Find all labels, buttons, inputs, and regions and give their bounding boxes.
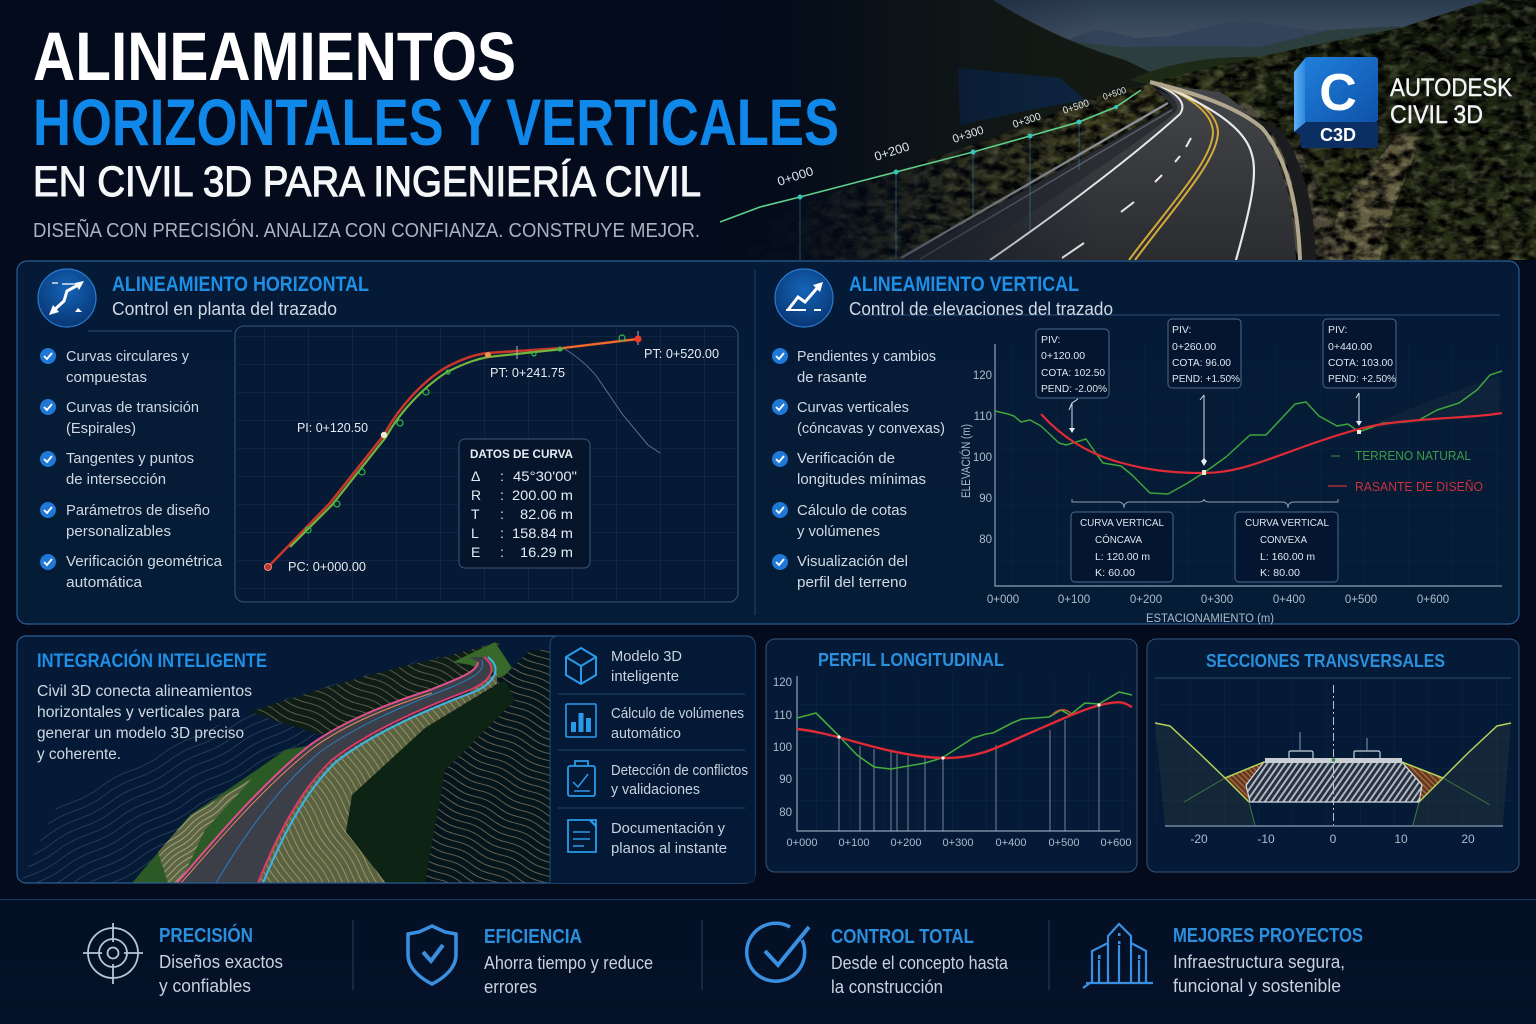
chart: perfil longitudinal: 110 bbox=[774, 710, 792, 722]
checklist: vertical: Visualización del bbox=[797, 553, 908, 570]
checklist: vertical: Curvas verticales bbox=[797, 399, 909, 416]
callout: PIV 0+440: 0+440.00 bbox=[1328, 341, 1372, 353]
chart: perfil vertical: 0+200 bbox=[1130, 594, 1162, 606]
callout: curva convexa: CURVA VERTICAL bbox=[1245, 517, 1329, 529]
chart: perfil vertical: 0+600 bbox=[1417, 594, 1449, 606]
chart: perfil vertical: 0+500 bbox=[1345, 594, 1377, 606]
checklist: horizontal: de intersección bbox=[66, 471, 166, 488]
checklist: horizontal: Parámetros de diseño bbox=[66, 502, 210, 519]
table: datos de curva: 16.29 m bbox=[520, 544, 573, 560]
title block: DISEÑA CON PRECISIÓN. ANALIZA CON CONFIANZA. CONSTRUYE MEJOR. bbox=[33, 218, 700, 242]
checklist: vertical: (cóncavas y convexas) bbox=[797, 420, 945, 437]
chart: perfil vertical: ESTACIONAMIENTO (m) bbox=[1146, 613, 1274, 625]
heading and description: horizontales y verticales para bbox=[37, 704, 240, 721]
benefits strip bbox=[0, 899, 1536, 1024]
table: datos de curva: 82.06 m bbox=[520, 506, 573, 522]
callout: PIV 0+260: PIV: bbox=[1172, 324, 1191, 336]
3D corridor model bbox=[20, 640, 552, 883]
checklist: vertical: Verificación de bbox=[797, 450, 895, 467]
panel: secciones transversales bbox=[1147, 639, 1519, 872]
chart: perfil longitudinal bbox=[773, 676, 1132, 849]
logo: Autodesk Civil 3D: C3D bbox=[1320, 125, 1356, 145]
heading: alineamiento vertical: ALINEAMIENTO VERTICAL bbox=[849, 273, 1079, 296]
feature list: Modelo 3D bbox=[611, 649, 682, 665]
benefit: eficiencia: Ahorra tiempo y reduce bbox=[484, 953, 653, 973]
checklist: horizontal: Tangentes y puntos bbox=[66, 450, 194, 467]
chart: perfil vertical: 0+100 bbox=[1058, 594, 1090, 606]
heading and description: INTEGRACIÓN INTELIGENTE bbox=[37, 650, 267, 672]
chart: planta del trazado: PC: 0+000.00 bbox=[288, 560, 366, 574]
heading: alineamiento horizontal: Control en planta del trazado bbox=[112, 299, 337, 319]
checklist: horizontal: Verificación geométrica bbox=[66, 553, 223, 570]
feature list: y validaciones bbox=[611, 782, 700, 798]
checklist: vertical: longitudes mínimas bbox=[797, 471, 926, 488]
heading: alineamiento horizontal bbox=[112, 273, 369, 319]
callout: curva convexa: K: 80.00 bbox=[1260, 567, 1300, 579]
chart: perfil longitudinal: 80 bbox=[779, 807, 792, 819]
panel: perfil longitudinal: PERFIL LONGITUDINAL bbox=[818, 650, 1004, 670]
benefit: control total: la construcción bbox=[831, 977, 943, 997]
heading and description bbox=[37, 650, 267, 763]
checklist: vertical bbox=[772, 348, 945, 591]
logo: Autodesk Civil 3D: C bbox=[1319, 64, 1357, 122]
callout: PIV 0+440 bbox=[1323, 319, 1396, 388]
chart: planta del trazado: PT: 0+241.75 bbox=[490, 366, 565, 380]
title block: HORIZONTALES Y VERTICALES bbox=[33, 85, 839, 159]
callout: curva convexa bbox=[1235, 512, 1338, 582]
chart: sección transversal bbox=[1155, 678, 1511, 846]
benefit: eficiencia bbox=[408, 926, 653, 997]
checklist: horizontal: Curvas circulares y bbox=[66, 348, 189, 365]
feature list: inteligente bbox=[611, 669, 679, 685]
callout: curva convexa: L: 160.00 m bbox=[1260, 551, 1315, 563]
table: datos de curva: : bbox=[500, 544, 504, 560]
benefit: precisión: PRECISIÓN bbox=[159, 923, 253, 947]
chart: perfil longitudinal: 0+000 bbox=[787, 837, 817, 849]
benefit: mejores proyectos: funcional y sostenible bbox=[1173, 976, 1341, 996]
callout: PIV 0+120: PIV: bbox=[1041, 334, 1060, 346]
callout: curva cóncava: CURVA VERTICAL bbox=[1080, 517, 1164, 529]
heading and description: generar un modelo 3D preciso bbox=[37, 725, 244, 742]
chart: perfil vertical: 120 bbox=[973, 370, 992, 382]
table: datos de curva: : bbox=[500, 487, 504, 503]
chart: planta del trazado: PT: 0+520.00 bbox=[644, 347, 719, 361]
icon: document bbox=[568, 820, 596, 852]
checklist: vertical: de rasante bbox=[797, 369, 867, 386]
benefit: mejores proyectos bbox=[1083, 924, 1363, 996]
table: datos de curva bbox=[459, 439, 590, 568]
checklist: horizontal bbox=[40, 348, 223, 591]
icon: cube bbox=[566, 648, 596, 684]
chart: sección transversal: 0 bbox=[1330, 832, 1337, 846]
logo: Autodesk Civil 3D: CIVIL 3D bbox=[1390, 101, 1483, 129]
callout: PIV 0+440: PEND: +2.50% bbox=[1328, 373, 1396, 385]
callout: PIV 0+260: COTA: 96.00 bbox=[1172, 357, 1231, 369]
benefit: control total: Desde el concepto hasta bbox=[831, 953, 1009, 973]
checklist: horizontal: personalizables bbox=[66, 523, 171, 540]
table: datos de curva: E bbox=[471, 544, 480, 560]
benefit: precisión: Diseños exactos bbox=[159, 952, 283, 972]
checklist: horizontal: (Espirales) bbox=[66, 420, 136, 437]
icon: clipboard check bbox=[568, 761, 595, 796]
benefit: mejores proyectos: MEJORES PROYECTOS bbox=[1173, 925, 1363, 947]
heading: alineamiento vertical: Control de elevaciones del trazado bbox=[849, 299, 1113, 319]
title block: EN CIVIL 3D PARA INGENIERÍA CIVIL bbox=[33, 158, 701, 206]
chart: sección transversal: 10 bbox=[1394, 832, 1408, 846]
alignment stationing overlay on road: 0+500 bbox=[1102, 85, 1127, 102]
callout: PIV 0+120: PEND: -2.00% bbox=[1041, 383, 1107, 395]
checklist: vertical: y volúmenes bbox=[797, 523, 880, 540]
heading and description: y coherente. bbox=[37, 746, 121, 763]
chart: perfil vertical: 100 bbox=[973, 452, 992, 464]
heading: alineamiento horizontal: ALINEAMIENTO HORIZONTAL bbox=[112, 273, 369, 296]
chart: perfil longitudinal: 0+100 bbox=[839, 837, 869, 849]
feature list: Documentación y bbox=[611, 821, 726, 837]
checklist: horizontal: compuestas bbox=[66, 369, 147, 386]
alignment stationing overlay on road: 0+300 bbox=[951, 125, 985, 146]
heading: alineamiento vertical bbox=[849, 273, 1113, 319]
table: datos de curva: 200.00 m bbox=[512, 487, 573, 503]
callout: PIV 0+120: COTA: 102.50 bbox=[1041, 367, 1105, 379]
chart: perfil vertical: 90 bbox=[979, 493, 992, 505]
callout: PIV 0+260: 0+260.00 bbox=[1172, 341, 1216, 353]
legend bbox=[1328, 448, 1483, 494]
chart: perfil longitudinal: 90 bbox=[779, 774, 792, 786]
callout: curva cóncava: K: 60.00 bbox=[1095, 567, 1135, 579]
table: datos de curva: Δ bbox=[471, 468, 480, 484]
feature list: planos al instante bbox=[611, 841, 727, 857]
heading and description: Civil 3D conecta alineamientos bbox=[37, 683, 252, 700]
callout: PIV 0+260: PEND: +1.50% bbox=[1172, 373, 1240, 385]
chart: perfil vertical bbox=[960, 319, 1502, 625]
panel: secciones transversales: SECCIONES TRANSVERSALES bbox=[1206, 651, 1445, 671]
alignment stationing overlay on road bbox=[720, 85, 1141, 260]
chart: sección transversal: -10 bbox=[1257, 832, 1275, 846]
callout: PIV 0+120 bbox=[1036, 329, 1109, 398]
benefit: eficiencia: errores bbox=[484, 977, 537, 997]
hero photo: mountain highway bbox=[800, 0, 1536, 260]
legend: TERRENO NATURAL bbox=[1355, 448, 1471, 463]
legend: RASANTE DE DISEÑO bbox=[1355, 479, 1483, 494]
chart: perfil longitudinal: 0+500 bbox=[1049, 837, 1079, 849]
alignment stationing overlay on road: 0+000 bbox=[776, 164, 815, 189]
table: datos de curva: : bbox=[500, 506, 504, 522]
callout: curva cóncava: L: 120.00 m bbox=[1095, 551, 1150, 563]
chart: sección transversal: 20 bbox=[1461, 832, 1475, 846]
feature list: Cálculo de volúmenes bbox=[611, 706, 744, 722]
chart: perfil longitudinal: 100 bbox=[773, 742, 792, 754]
benefit: precisión: y confiables bbox=[159, 976, 251, 996]
benefit: eficiencia: EFICIENCIA bbox=[484, 926, 582, 948]
chart: sección transversal: -20 bbox=[1190, 832, 1208, 846]
chart: perfil vertical: 110 bbox=[974, 411, 992, 423]
table: datos de curva: : bbox=[500, 468, 504, 484]
callout: PIV 0+440: COTA: 103.00 bbox=[1328, 357, 1393, 369]
title block: ALINEAMIENTOS bbox=[33, 18, 516, 95]
table: datos de curva: L bbox=[471, 525, 479, 541]
panel: perfil longitudinal bbox=[766, 639, 1137, 872]
checklist: vertical: Cálculo de cotas bbox=[797, 502, 907, 519]
checklist: horizontal: automática bbox=[66, 574, 143, 591]
chart: perfil longitudinal: 0+600 bbox=[1101, 837, 1131, 849]
callout: curva cóncava bbox=[1071, 512, 1173, 582]
callout: PIV 0+120: 0+120.00 bbox=[1041, 350, 1085, 362]
feature list: automático bbox=[611, 726, 681, 742]
feature list: Detección de conflictos bbox=[611, 763, 748, 779]
table: datos de curva: DATOS DE CURVA bbox=[470, 447, 573, 461]
chart: perfil longitudinal: 120 bbox=[773, 677, 792, 689]
chart: planta del trazado bbox=[235, 326, 738, 602]
chart: perfil vertical: ELEVACIÓN (m) bbox=[960, 424, 973, 498]
alignment stationing overlay on road: 0+500 bbox=[1062, 98, 1091, 117]
title block bbox=[33, 18, 839, 242]
icon: vertical alignment bbox=[775, 269, 833, 327]
callout: curva cóncava: CÓNCAVA bbox=[1095, 533, 1142, 546]
table: datos de curva: 45°30'00" bbox=[513, 468, 577, 484]
benefit: precisión bbox=[83, 923, 283, 996]
alignment stationing overlay on road: 0+200 bbox=[873, 139, 911, 164]
alignment stationing overlay on road: 0+300 bbox=[1011, 110, 1043, 131]
checklist: vertical: perfil del terreno bbox=[797, 574, 907, 591]
chart: perfil vertical: 0+400 bbox=[1273, 594, 1305, 606]
chart: perfil vertical: 0+000 bbox=[987, 594, 1019, 606]
table: datos de curva: T bbox=[471, 506, 480, 522]
benefit: mejores proyectos: Infraestructura segura, bbox=[1173, 952, 1345, 972]
logo: Autodesk Civil 3D bbox=[1294, 57, 1512, 148]
panel: alineamiento horizontal y vertical bbox=[17, 261, 1519, 625]
benefit: control total bbox=[747, 923, 1009, 997]
callout: PIV 0+440: PIV: bbox=[1328, 324, 1347, 336]
table: datos de curva: : bbox=[500, 525, 504, 541]
callout: curva convexa: CONVEXA bbox=[1260, 534, 1307, 546]
table: datos de curva: 158.84 m bbox=[512, 525, 573, 541]
chart: planta del trazado: PI: 0+120.50 bbox=[297, 421, 368, 435]
chart: perfil vertical: 80 bbox=[979, 534, 992, 546]
chart: perfil longitudinal: 0+400 bbox=[996, 837, 1026, 849]
checklist: horizontal: Curvas de transición bbox=[66, 399, 199, 416]
feature list bbox=[550, 636, 755, 883]
icon: volume bars bbox=[566, 704, 596, 737]
table: datos de curva: R bbox=[471, 487, 481, 503]
icon: horizontal alignment bbox=[38, 269, 96, 327]
benefit: control total: CONTROL TOTAL bbox=[831, 926, 974, 948]
callout: PIV 0+260 bbox=[1168, 319, 1241, 388]
chart: perfil longitudinal: 0+200 bbox=[891, 837, 921, 849]
logo: Autodesk Civil 3D: AUTODESK bbox=[1390, 74, 1512, 102]
panel: integración inteligente bbox=[17, 636, 755, 883]
chart: perfil vertical: 0+300 bbox=[1201, 594, 1233, 606]
chart: perfil longitudinal: 0+300 bbox=[943, 837, 973, 849]
checklist: vertical: Pendientes y cambios bbox=[797, 348, 936, 365]
